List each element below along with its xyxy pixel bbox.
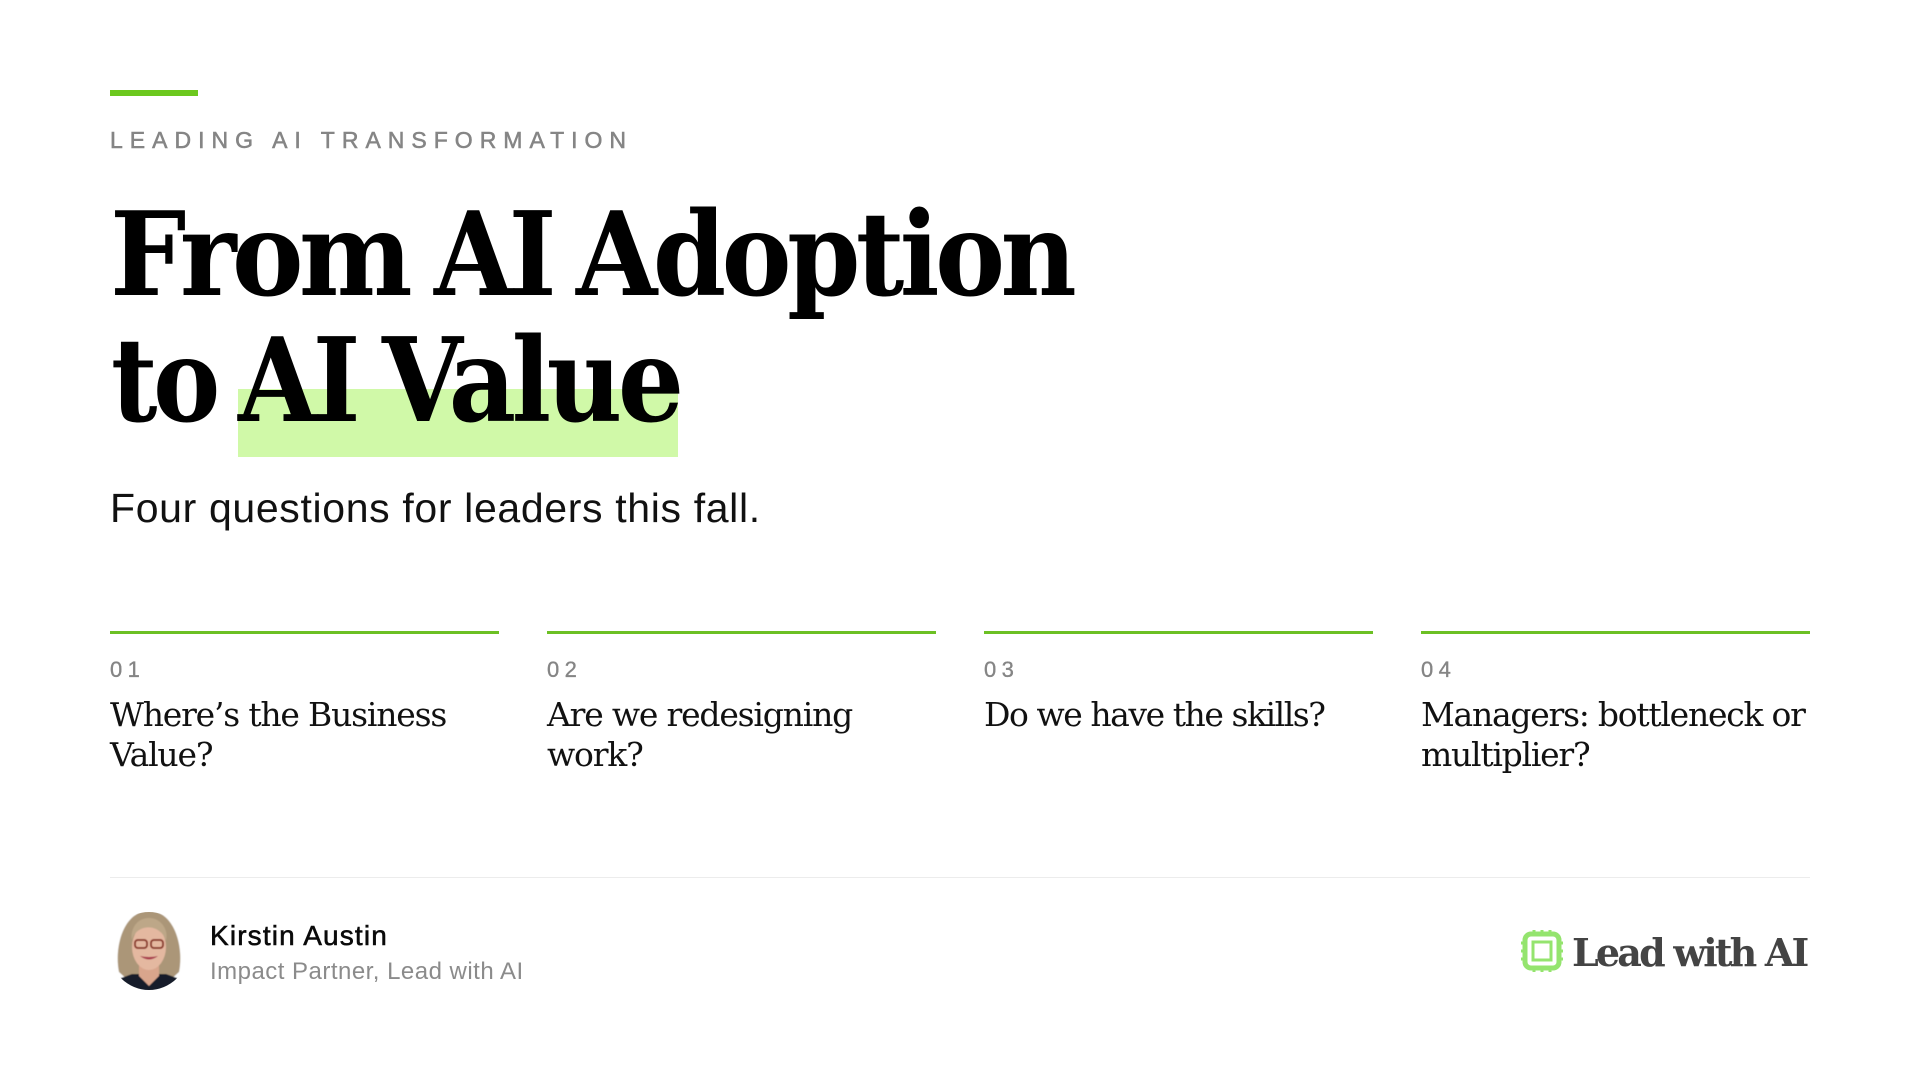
title: to [111,313,216,449]
title: Adoption [576,187,1072,323]
icon: chip logo [1521,930,1563,972]
title: AI [238,313,356,449]
question 04: Managers: bottleneck or [1421,695,1805,734]
question 02 [546,631,936,774]
question 04: 04 [1421,657,1456,682]
question 01: Where’s the Business [110,695,446,734]
avatar: portrait [117,912,181,990]
title: From [110,187,408,323]
question 01: 01 [110,657,145,682]
question 02: 02 [547,657,582,682]
subtitle: Four questions for leaders this fall. [110,485,761,531]
eyebrow: LEADING AI TRANSFORMATION [110,127,633,153]
footer divider [110,877,1810,878]
question 04: multiplier? [1421,735,1589,774]
question 01 [110,631,499,774]
question 03 [984,631,1373,734]
title: Value [382,313,680,449]
title: AI [434,187,552,323]
highlight [238,389,678,457]
logo wordmark: Lead with AI [1572,930,1807,975]
question 02: Are we redesigning [547,695,852,734]
question 01: Value? [110,735,212,774]
title [110,187,1074,457]
presenter role: Impact Partner, Lead with AI [210,958,524,985]
question 02: work? [547,735,643,774]
question 03: 03 [984,657,1019,682]
question 04 [1421,631,1810,774]
accent bar [110,90,198,96]
presenter name: Kirstin Austin [210,920,388,951]
question 03: Do we have the skills? [984,695,1325,734]
